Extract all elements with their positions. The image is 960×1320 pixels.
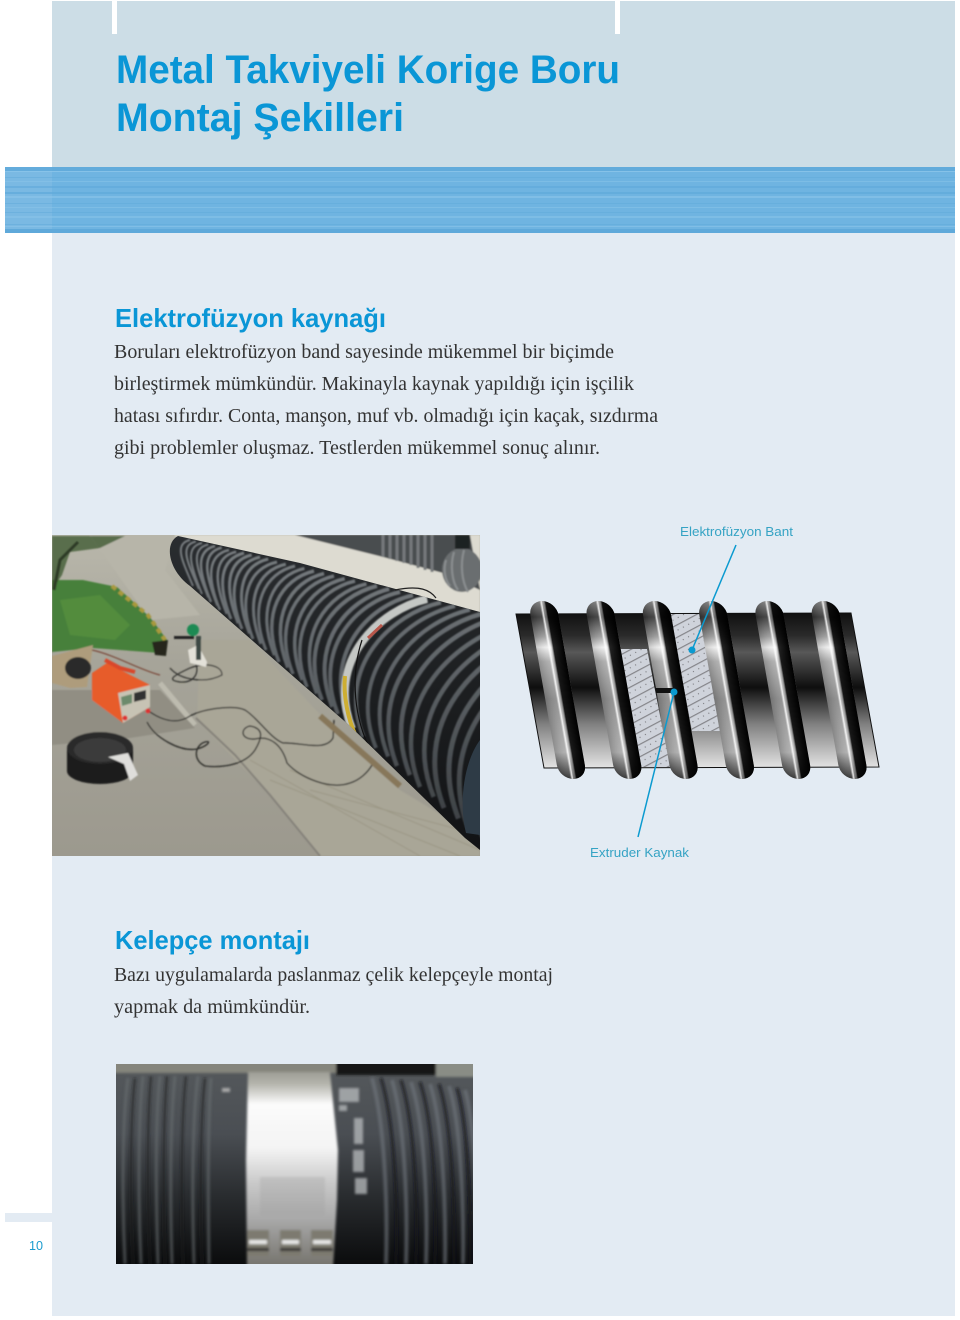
paragraph: elektrofüzyon: hatası sıfırdır. Conta, manşon, muf vb. olmadığı için kaçak, sızdırma: [114, 405, 658, 427]
photo: stainless clamp on pipe: [110, 1060, 478, 1268]
lighter path beside pipe: [90, 535, 200, 620]
corrugation ribs: [528, 601, 869, 779]
header tick marks: [112, 0, 620, 34]
clamp band: [246, 1072, 338, 1268]
tree: [52, 536, 125, 590]
pipe end opening: [463, 740, 480, 835]
pipe wall: [516, 613, 879, 768]
pallet: [320, 716, 400, 786]
header panel: [52, 1, 955, 167]
callout: Extruder Kaynak: Extruder Kaynak: [590, 845, 690, 860]
title: [116, 48, 620, 140]
diagram: corrugated pipe section: [516, 601, 879, 779]
striped blue band: [5, 167, 955, 233]
paragraph: elektrofüzyon: birleştirmek mümkündür. Makinayla kaynak yapıldığı için işçilik: [114, 373, 634, 395]
printed marks on pipe: [339, 1088, 367, 1194]
title: Metal Takviyeli Korige Boru: [116, 48, 620, 92]
welding tool: [188, 645, 207, 667]
kerb: [160, 683, 195, 725]
paragraph: elektrofüzyon: Boruları elektrofüzyon band sayesinde mükemmel bir biçimde: [114, 341, 614, 363]
electrofusion band patches: [619, 614, 720, 767]
page number tab: 10: [29, 1238, 43, 1253]
pale ground behind pipe: [170, 535, 480, 615]
page number tab: [5, 1213, 52, 1253]
grass: [52, 580, 167, 653]
callout: Extruder Kaynak: [590, 688, 690, 860]
callout: Elektrofüzyon Bant: Elektrofüzyon Bant: [680, 524, 793, 539]
main pipe: [170, 536, 480, 850]
heading: Elektrofüzyon kaynağı: Elektrofüzyon kaynağı: [115, 303, 386, 333]
paragraph: elektrofüzyon: gibi problemler oluşmaz. Testlerden mükemmel sonuç alınır.: [114, 437, 600, 459]
paragraph: kelepçe: Bazı uygulamalarda paslanmaz çelik kelepçeyle montaj: [114, 964, 553, 986]
paragraph: kelepçe: [114, 964, 553, 1018]
title: Montaj Şekilleri: [116, 96, 404, 140]
concrete slab: [52, 690, 195, 745]
paragraph: kelepçe: yapmak da mümkündür.: [114, 996, 310, 1018]
left ribs: [123, 1076, 211, 1264]
pipe rib highlights: [179, 538, 480, 838]
cardboard and coil: [52, 645, 93, 688]
photo: pipe welding site: [52, 535, 480, 856]
clamp bolts: [247, 1230, 333, 1256]
heading: Kelepçe montajı: Kelepçe montajı: [115, 925, 310, 955]
ribbed concrete strip: [197, 640, 480, 856]
top background strip: [116, 1064, 338, 1076]
background pipes: [295, 535, 480, 590]
callout: Elektrofüzyon Bant: [680, 524, 793, 654]
silver band on pipe: [345, 599, 427, 729]
extruder weld bar: [656, 688, 677, 693]
orange machine: [92, 663, 150, 723]
paragraph: elektrofüzyon: [114, 341, 658, 459]
right ribs: [372, 1078, 477, 1264]
band coil: [66, 770, 129, 785]
cable over pipe: [395, 588, 436, 598]
ground cables: [147, 708, 372, 785]
small cable coil: [92, 650, 222, 682]
